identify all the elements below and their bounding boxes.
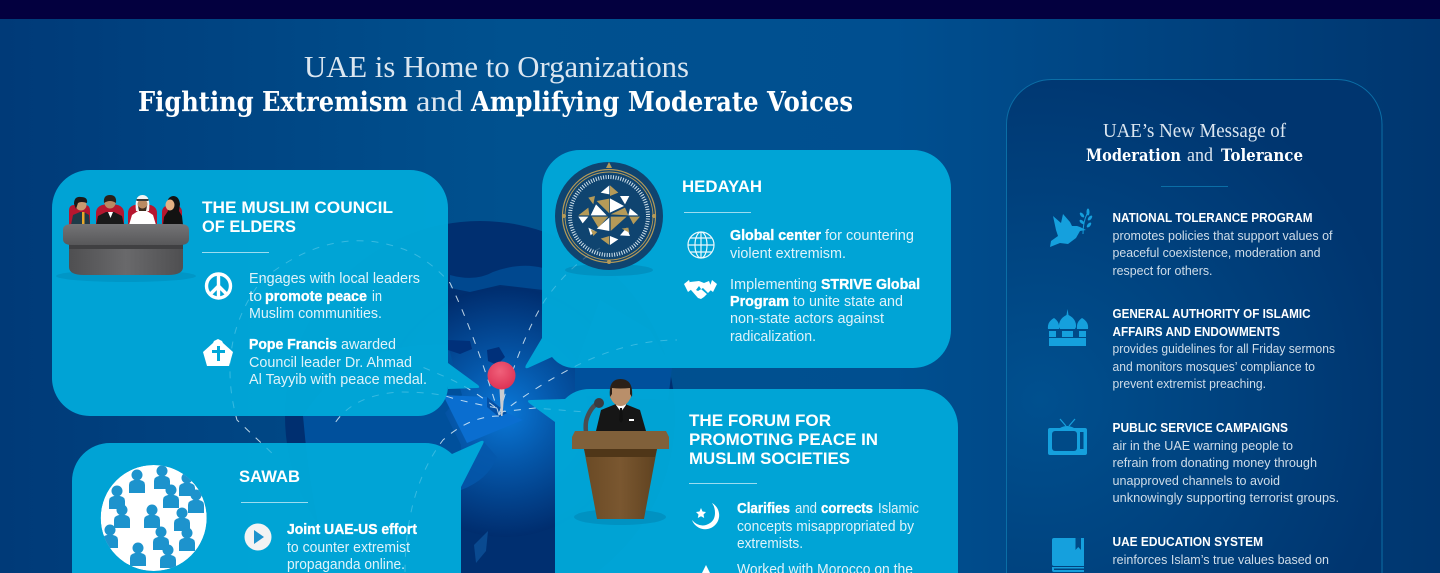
text: Global center xyxy=(730,228,914,262)
item: public service: unapproved channels to avoid xyxy=(1112,474,1280,488)
heading: OF ELDERS xyxy=(202,217,296,236)
text: STRIVE: Implementing xyxy=(730,277,817,293)
title: Fighting Extremism xyxy=(138,87,408,118)
route lines, bright xyxy=(230,241,677,573)
text: joint effort: propaganda online. xyxy=(287,557,405,573)
text: Pope Francis: Council leader Dr. Ahmad xyxy=(249,355,412,371)
text: clarifies: Clarifies xyxy=(737,501,790,517)
icon: Hedayah emblem xyxy=(555,162,663,276)
title: UAE is Home to Organizations xyxy=(304,49,689,84)
heading: and xyxy=(1187,145,1213,166)
text: STRIVE xyxy=(730,277,920,345)
item: public service xyxy=(1112,421,1339,505)
item: education system: reinforces Islam’s true values based on xyxy=(1112,553,1329,567)
text: joint effort: to counter extremist xyxy=(287,540,410,556)
title xyxy=(138,49,853,118)
text: clarifies: concepts misappropriated by xyxy=(737,519,915,535)
icon: play button xyxy=(244,524,272,550)
text: promote peace: to xyxy=(249,289,262,305)
text: STRIVE: Program xyxy=(730,294,789,310)
text: STRIVE: radicalization. xyxy=(730,329,816,345)
icon: book xyxy=(1052,538,1084,572)
text: promote peace: in xyxy=(372,289,382,305)
item: national tolerance: promotes policies that support values of xyxy=(1112,229,1333,243)
heading: SAWAB xyxy=(239,467,300,486)
heading: THE MUSLIM COUNCIL xyxy=(202,198,393,217)
item: national tolerance xyxy=(1112,211,1333,278)
text: clarifies xyxy=(737,501,919,552)
panel: Sawab xyxy=(72,441,484,573)
item: public service: refrain from donating money through xyxy=(1112,456,1317,470)
panel: Muslim Council of Elders xyxy=(52,170,479,416)
text: Pope Francis: Al Tayyib with peace medal. xyxy=(249,372,427,388)
heading xyxy=(202,198,393,236)
item: education system xyxy=(1112,535,1329,567)
panel: Hedayah xyxy=(525,150,951,368)
icon: minaret xyxy=(702,565,710,573)
item: national tolerance: respect for others. xyxy=(1112,264,1212,278)
heading: MUSLIM SOCIETIES xyxy=(689,449,850,468)
illustration: podium speaker xyxy=(572,379,669,525)
heading: HEDAYAH xyxy=(682,177,762,196)
text: Pope Francis xyxy=(249,337,427,388)
globe xyxy=(285,182,675,573)
text: clarifies: corrects xyxy=(821,501,873,517)
item: general authority: prevent extremist preaching. xyxy=(1112,377,1266,391)
route lines, faint over panels xyxy=(230,241,677,573)
map pin xyxy=(488,362,516,416)
text: STRIVE: STRIVE Global xyxy=(821,277,920,293)
item: general authority xyxy=(1112,307,1335,391)
text: Pope Francis: awarded xyxy=(341,337,396,353)
heading xyxy=(689,411,878,468)
icon: peace sign xyxy=(206,274,230,298)
illustration: council table xyxy=(56,195,196,282)
icon: mosque xyxy=(1048,309,1088,346)
heading: THE FORUM FOR xyxy=(689,411,831,430)
text: joint effort: Joint UAE-US effort xyxy=(287,522,417,538)
text: STRIVE: non-state actors against xyxy=(730,311,884,327)
item: national tolerance: peaceful coexistence, moderation and xyxy=(1112,246,1321,260)
heading xyxy=(1086,120,1303,166)
text: STRIVE: to unite state and xyxy=(793,294,903,310)
text: promote peace xyxy=(249,271,420,322)
text: clarifies: and xyxy=(795,501,817,517)
text: joint effort xyxy=(287,522,417,573)
text: clarifies: extremists. xyxy=(737,536,803,552)
text: promote peace: Muslim communities. xyxy=(249,306,382,322)
icon: Sawab globe xyxy=(101,465,207,571)
heading: Moderation xyxy=(1086,146,1181,166)
icon: crescent and star xyxy=(692,503,719,529)
item: public service: unknowingly supporting terrorist groups. xyxy=(1112,491,1339,505)
item: public service: PUBLIC SERVICE CAMPAIGNS xyxy=(1112,421,1288,435)
item: general authority: GENERAL AUTHORITY OF ISLAMIC xyxy=(1112,307,1310,321)
icon: television xyxy=(1048,419,1087,455)
text: Global center: violent extremism. xyxy=(730,246,846,262)
icon: globe xyxy=(688,232,714,258)
item: public service: air in the UAE warning people to xyxy=(1112,439,1293,453)
text: Global center: for countering xyxy=(825,228,914,244)
item: general authority: and monitors mosques’ compliance to xyxy=(1112,360,1315,374)
panel: Forum for Promoting Peace xyxy=(528,379,958,573)
heading: Tolerance xyxy=(1221,146,1303,166)
text: clarifies: Islamic xyxy=(878,501,919,517)
icon: handshake xyxy=(684,280,717,299)
title: Amplifying Moderate Voices xyxy=(470,87,853,118)
icon: pope mitre xyxy=(203,339,233,366)
heading: PROMOTING PEACE IN xyxy=(689,430,878,449)
text: promote peace: Engages with local leaders xyxy=(249,271,420,287)
text: promote peace: promote peace xyxy=(265,289,367,305)
icon: dove xyxy=(1050,208,1093,247)
item: national tolerance: NATIONAL TOLERANCE PROGRAM xyxy=(1112,211,1312,225)
text: Global center: Global center xyxy=(730,228,821,244)
title: and xyxy=(416,85,463,118)
text: Pope Francis: Pope Francis xyxy=(249,337,337,353)
item: general authority: AFFAIRS AND ENDOWMENTS xyxy=(1112,325,1280,339)
item: general authority: provides guidelines for all Friday sermons xyxy=(1112,342,1335,356)
heading: UAE’s New Message of xyxy=(1103,120,1286,142)
item: education system: UAE EDUCATION SYSTEM xyxy=(1112,535,1263,549)
panel: UAE's new message xyxy=(1006,80,1382,573)
top band xyxy=(0,0,1440,19)
